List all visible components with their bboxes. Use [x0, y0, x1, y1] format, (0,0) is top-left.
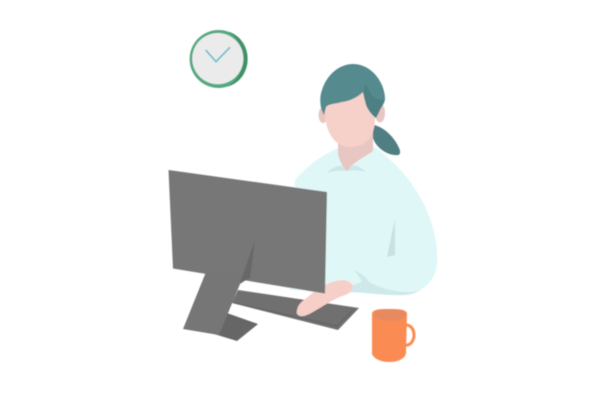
monitor stand: [183, 272, 252, 335]
neck: [338, 132, 373, 171]
ponytail: [372, 125, 400, 155]
hair shadow: [363, 84, 385, 118]
hair: [320, 64, 385, 118]
shirt crease: [387, 218, 395, 257]
hand: [297, 280, 353, 316]
monitor screen back: [168, 170, 327, 294]
mug inside: [374, 309, 406, 321]
monitor stand shadow: [240, 240, 255, 283]
keyboard: [232, 290, 359, 330]
monitor base: [214, 312, 258, 341]
face: [325, 90, 375, 147]
shirt: [290, 143, 437, 295]
icon: wall clock: [190, 30, 248, 88]
shirt collar shadow: [327, 165, 366, 173]
ear: left: [318, 107, 328, 123]
sleeve shadow: [347, 270, 422, 295]
ear: right: [375, 104, 385, 122]
icon: orange mug: [372, 309, 414, 362]
